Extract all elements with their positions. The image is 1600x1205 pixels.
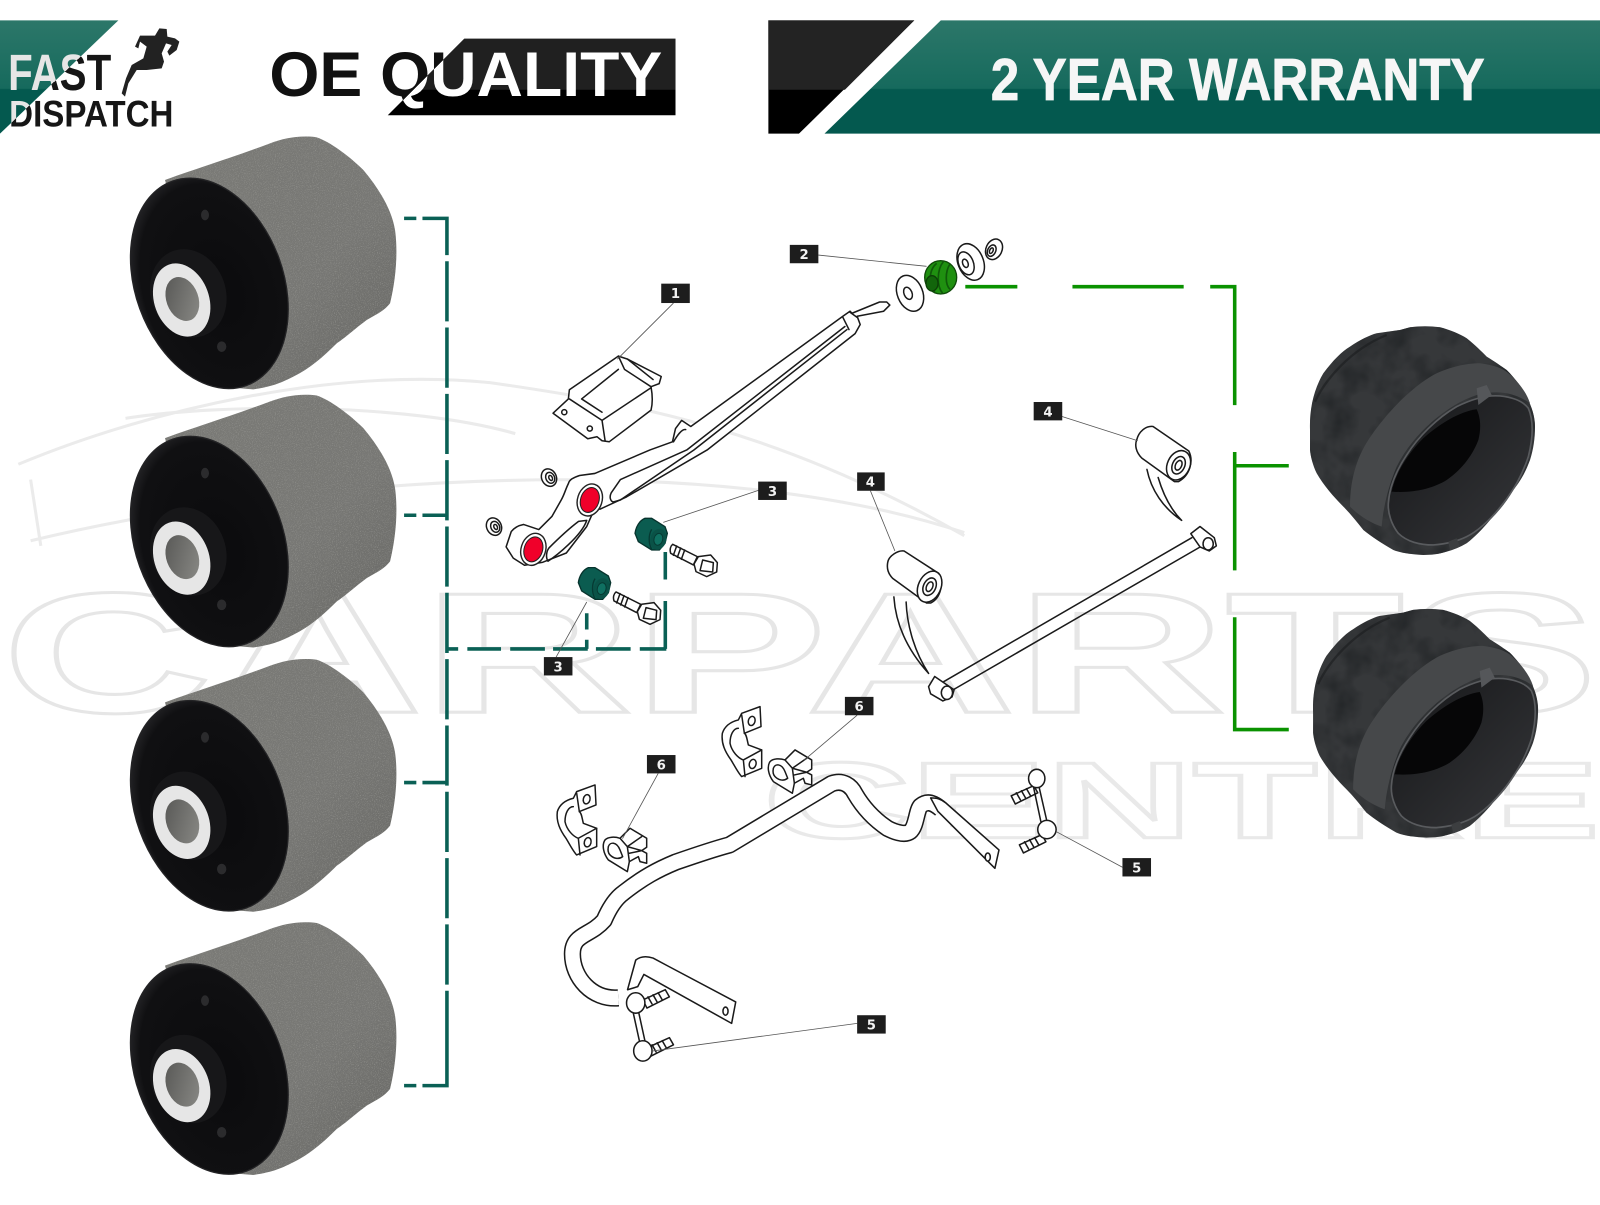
- label 4 left: 4: [866, 476, 875, 491]
- label 6 left: 6: [657, 758, 666, 773]
- clamp top: [722, 707, 762, 777]
- black slanted block: [768, 20, 914, 134]
- bolt upper: [670, 544, 717, 577]
- teal dashed bracket: parts 3: [447, 552, 666, 649]
- diagram: stabiliser link upper: [1011, 769, 1056, 853]
- label 1: 1: [671, 287, 680, 302]
- diagram: stabiliser link lower: [627, 990, 673, 1061]
- photo: grey bushing 2: [103, 395, 396, 669]
- icon: running man: [122, 28, 179, 97]
- oe quality text: OE QUALITY: [269, 40, 662, 110]
- label 5 lower: [857, 1015, 886, 1034]
- nut lower: [484, 515, 504, 538]
- photo: black rubber bush 2: [1313, 609, 1538, 838]
- fast dispatch text: DISPATCH: [9, 94, 173, 135]
- black slanted plate: [388, 39, 676, 115]
- clamp bush top: [768, 750, 812, 793]
- header: warranty banner: [768, 20, 1600, 134]
- nut: [982, 236, 1006, 262]
- leader lines: [556, 255, 1138, 1051]
- label 4 right: [1034, 402, 1062, 420]
- label 5 right: [1122, 858, 1151, 876]
- diagram: mounting block part 1: [553, 356, 661, 442]
- label 3 lower: 3: [554, 660, 563, 675]
- cup washer: [952, 240, 990, 284]
- header: oe quality badge: [269, 39, 676, 115]
- diagram: tie rod: [894, 469, 1216, 701]
- diagram: clamps and clamp bushes: [557, 707, 812, 872]
- label 4 left: [857, 472, 885, 491]
- photo: grey bushing 3: [103, 659, 396, 933]
- header: fast dispatch badge: [0, 20, 179, 135]
- teal bush part 3 lower: [578, 568, 612, 601]
- red hole upper: [573, 481, 606, 519]
- teal corner triangle: [0, 20, 118, 134]
- diagram: radius arm: [506, 302, 890, 569]
- label 1: [661, 284, 690, 303]
- watermark: car parts centre: [2, 379, 1600, 861]
- green bush part 2: [925, 261, 957, 294]
- label 6 upper: [845, 697, 873, 715]
- label 6 left: [647, 755, 676, 773]
- watermark: car parts centre: CENTRE: [763, 740, 1600, 861]
- diagram: arm nuts and teal bushes and bolts: [484, 466, 717, 624]
- fast dispatch text: [8, 44, 173, 135]
- clamp bush left: [603, 828, 647, 872]
- label 5 lower: 5: [867, 1019, 876, 1034]
- teal bush part 3 upper: [635, 518, 669, 552]
- red hole lower: [517, 530, 550, 569]
- diagram: bush part 4 left: [887, 551, 947, 606]
- bolt lower: [613, 592, 661, 624]
- photo: black rubber bush 1: [1310, 326, 1535, 555]
- label 3 lower: [544, 657, 572, 675]
- diagram: anti-roll bar: [572, 782, 999, 1023]
- photo: grey bushing 1: [103, 137, 396, 411]
- label 4 right: 4: [1043, 405, 1053, 420]
- label 2: [790, 245, 818, 263]
- teal dashed bracket: left bushings: [404, 218, 447, 1086]
- watermark: car parts centre: CARPARTS: [2, 558, 1598, 749]
- washer: [891, 271, 929, 315]
- teal band: [824, 20, 1600, 134]
- fast dispatch text: FAST: [8, 44, 111, 101]
- diagram: shaft hardware: [891, 236, 1006, 315]
- nut upper: [539, 466, 559, 489]
- photo: grey bushing 4: [103, 922, 396, 1196]
- label 2: 2: [799, 248, 809, 263]
- green bracket: part 2 to rubber bushes: [965, 287, 1289, 730]
- diagram: bush part 4 right: [1136, 426, 1195, 484]
- warranty text: 2 YEAR WARRANTY: [991, 46, 1485, 113]
- label 5 right: 5: [1132, 861, 1141, 876]
- label 6 upper: 6: [855, 700, 864, 715]
- label 3 upper: [758, 482, 787, 500]
- label 3 upper: 3: [768, 485, 777, 500]
- clamp left: [557, 785, 597, 855]
